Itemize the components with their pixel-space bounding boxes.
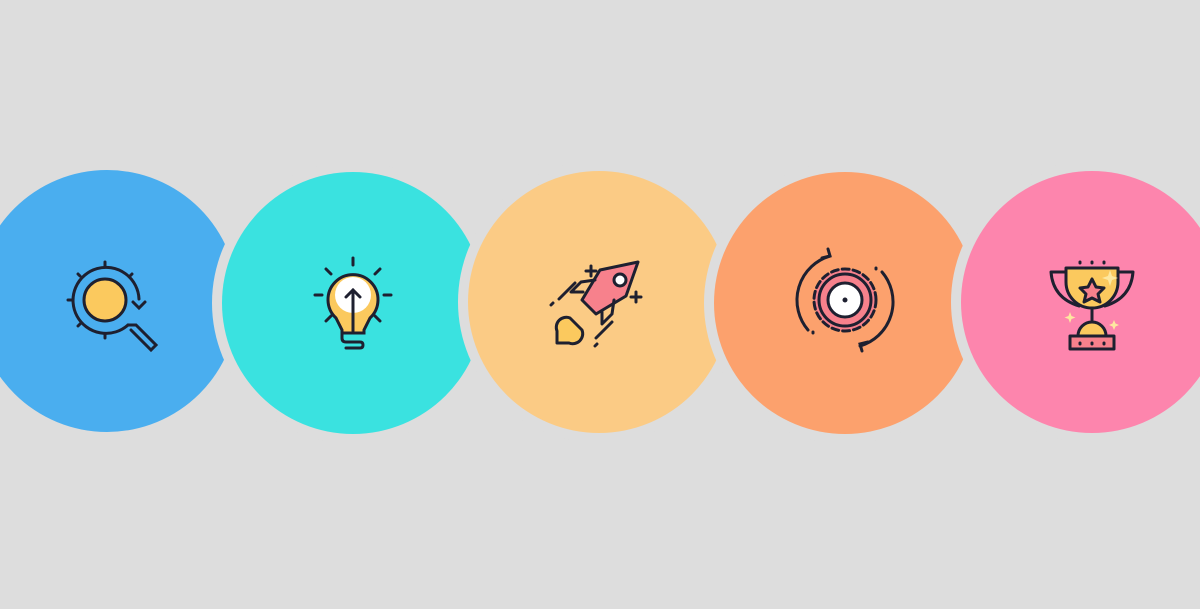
- circle 3: launch: [458, 161, 740, 443]
- icon: trophy: [1051, 262, 1133, 349]
- icon: gear: [797, 249, 893, 351]
- circle 5: trophy: [951, 161, 1200, 443]
- circle 1: search: [0, 170, 238, 432]
- icon: rocket: [551, 262, 641, 346]
- icon: magnifier: [68, 262, 156, 350]
- icon: light bulb: [315, 258, 391, 348]
- circle 4: settings: [704, 162, 986, 444]
- circle 2: idea: [212, 162, 494, 444]
